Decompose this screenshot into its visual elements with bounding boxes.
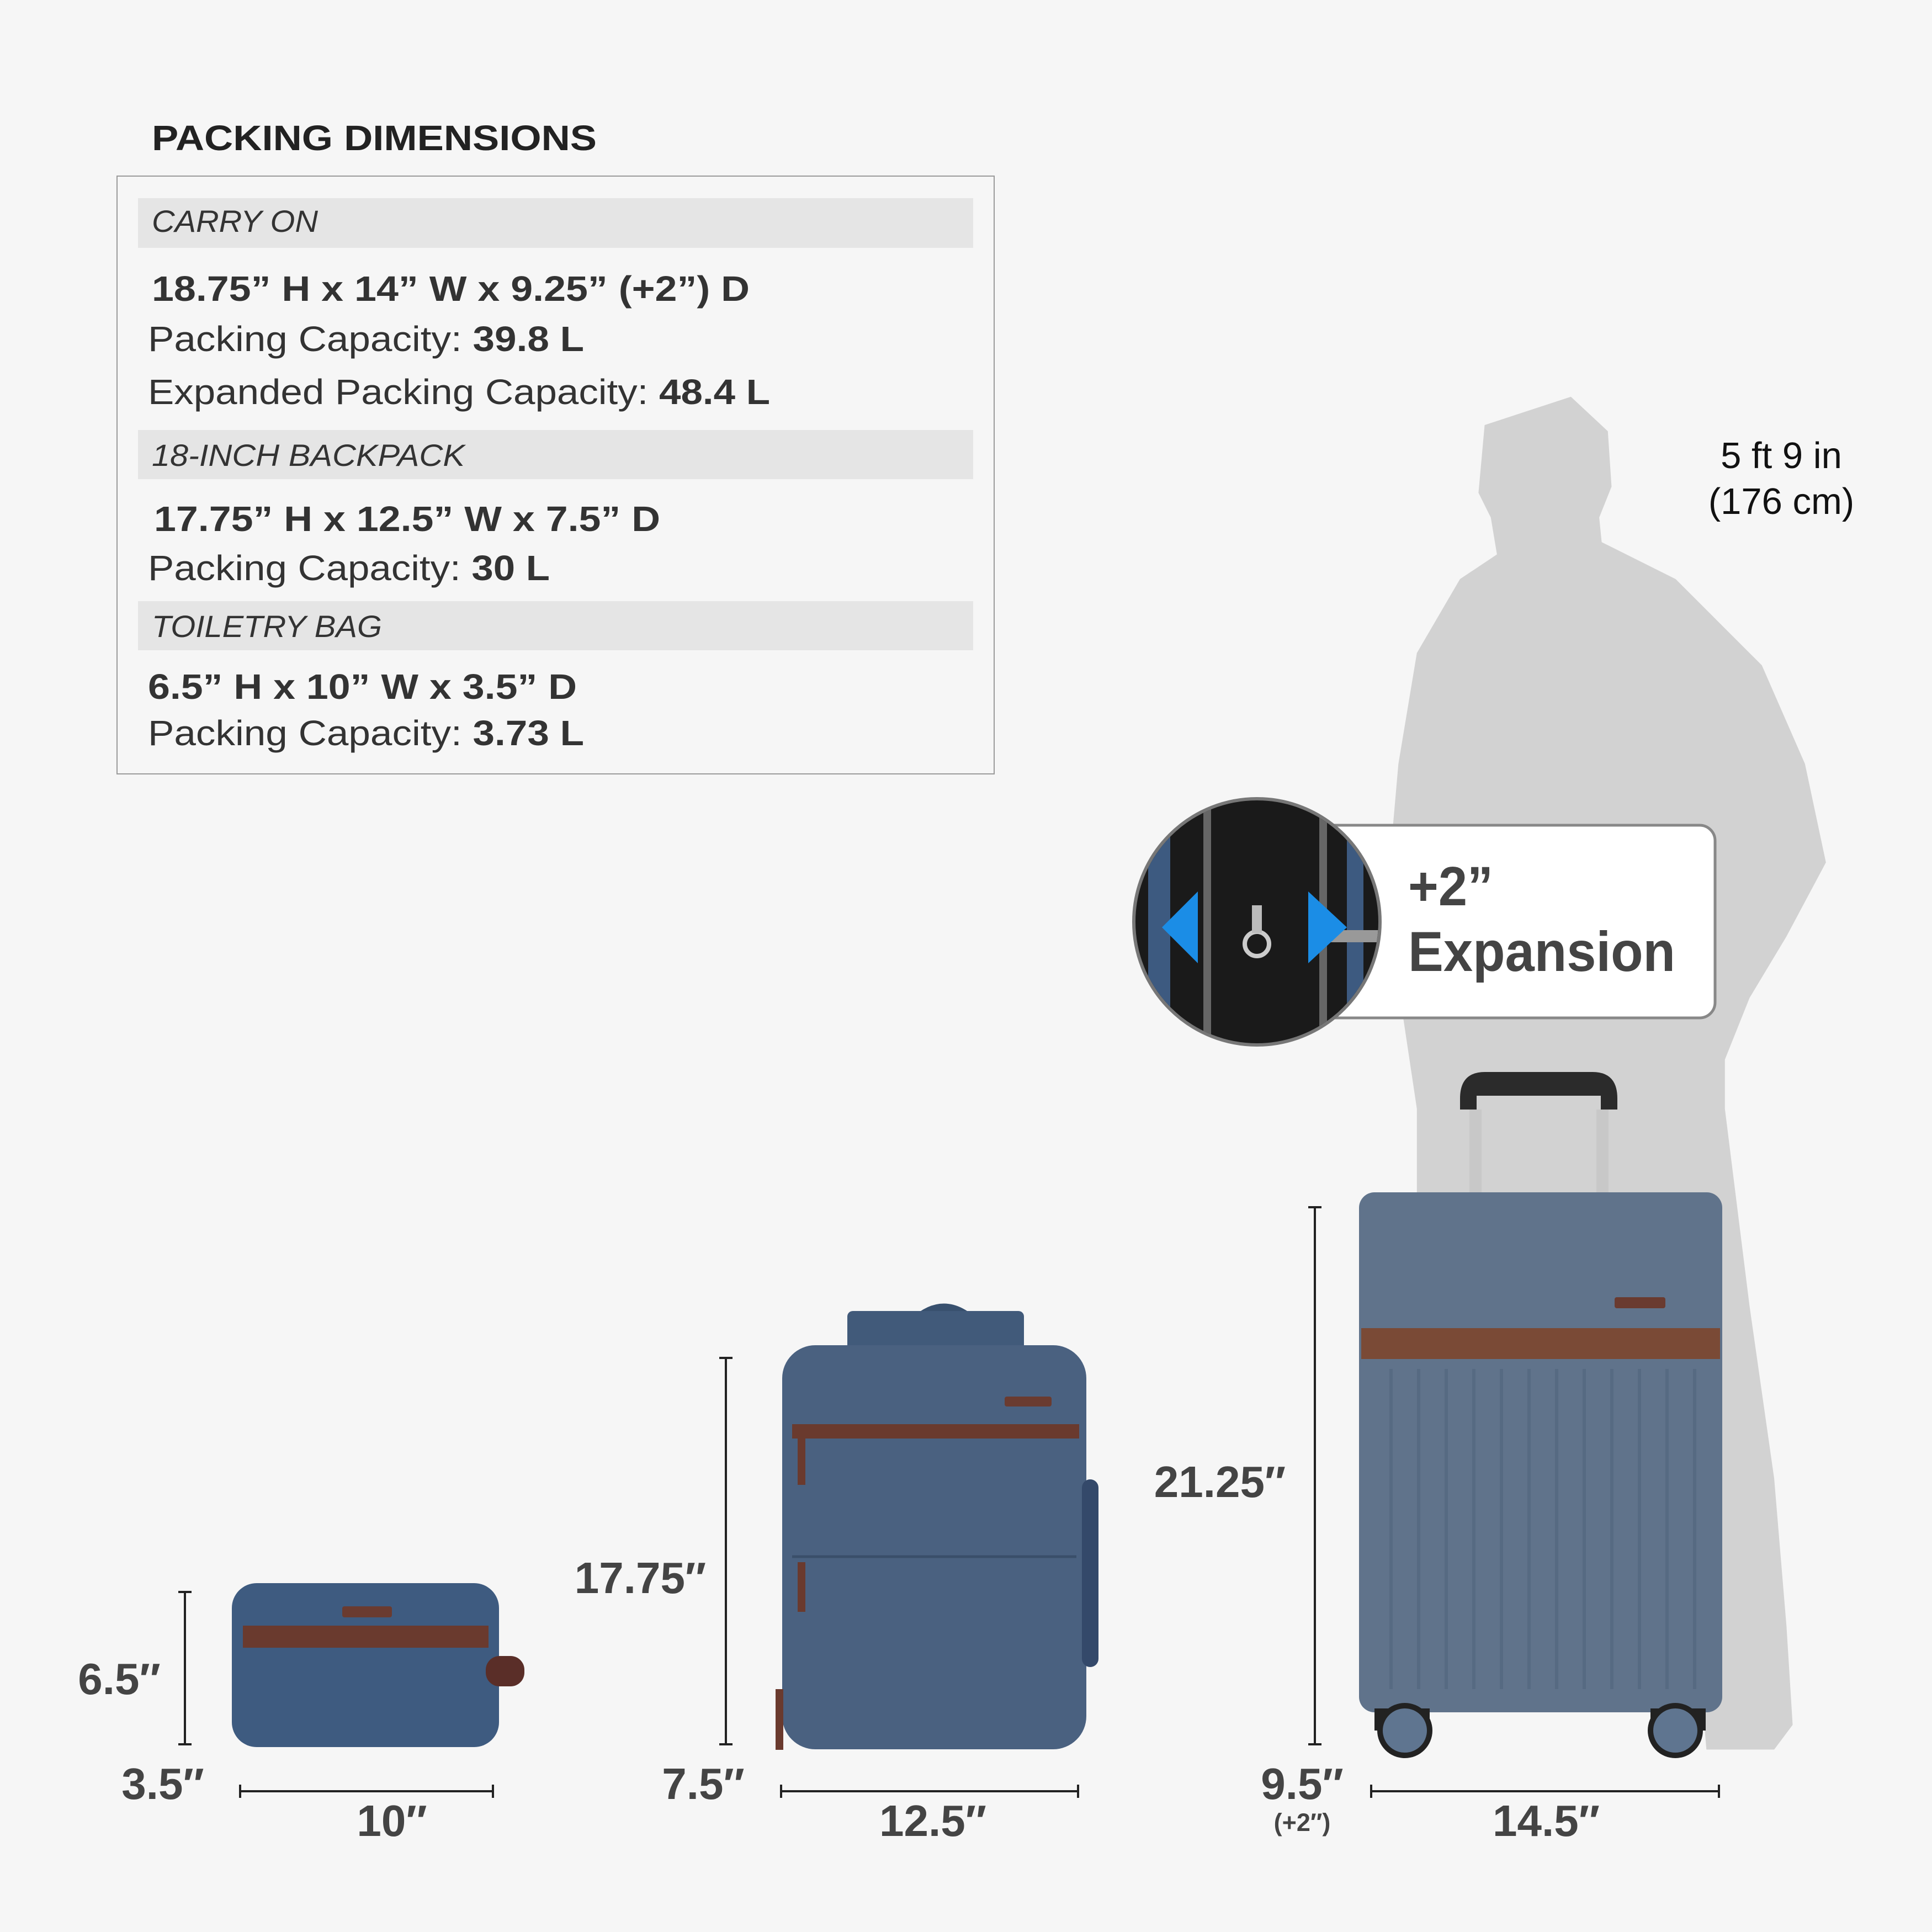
panel: packing dimensions table xyxy=(117,176,994,774)
header: toiletry bag: TOILETRY BAG xyxy=(152,609,382,644)
dimension labels: 9.5″ xyxy=(1261,1759,1344,1808)
text: carry on specs xyxy=(148,269,770,412)
header: carry on xyxy=(138,198,973,248)
text: carry on specs: Packing Capacity: 39.8 L xyxy=(148,319,584,359)
dimension labels: 17.75″ xyxy=(575,1553,706,1602)
text: backpack specs: Packing Capacity: 30 L xyxy=(148,548,550,588)
text: backpack specs: 17.75” H x 12.5” W x 7.5” D xyxy=(154,499,660,539)
silhouette: person xyxy=(1390,397,1826,1749)
header: backpack xyxy=(138,430,973,479)
height label xyxy=(1708,435,1854,522)
dimension labels: 10″ xyxy=(357,1796,427,1845)
callout: expansion xyxy=(1134,795,1715,1049)
height label: 5 ft 9 in xyxy=(1721,435,1842,476)
text: carry on specs: Expanded Packing Capacity: 48.4 L xyxy=(148,372,770,412)
toiletry bag xyxy=(232,1583,524,1747)
height label: (176 cm) xyxy=(1708,481,1854,522)
dimension labels xyxy=(78,1457,1600,1845)
text: toiletry specs xyxy=(148,667,584,753)
text: toiletry specs: Packing Capacity: 3.73 L xyxy=(148,713,584,753)
text: backpack specs xyxy=(148,499,660,588)
text: toiletry specs: 6.5” H x 10” W x 3.5” D xyxy=(148,667,577,707)
dimension labels: 14.5″ xyxy=(1493,1796,1600,1845)
suitcase xyxy=(1359,1072,1722,1758)
header: carry on: CARRY ON xyxy=(152,204,319,238)
text: carry on specs: 18.75” H x 14” W x 9.25” (+2”) D xyxy=(152,269,750,309)
header: backpack: 18-INCH BACKPACK xyxy=(152,438,466,473)
dimension labels: (+2″) xyxy=(1274,1808,1330,1837)
dimension labels: 12.5″ xyxy=(879,1796,986,1845)
dimension labels: 6.5″ xyxy=(78,1654,161,1703)
icon: zipper close-up xyxy=(1134,795,1380,1049)
dimension labels: 7.5″ xyxy=(662,1759,745,1808)
header: toiletry bag xyxy=(138,601,973,650)
dimension labels: 3.5″ xyxy=(121,1759,204,1808)
arrow: expansion xyxy=(1162,891,1198,963)
title: PACKING DIMENSIONS xyxy=(152,118,597,158)
dimension lines xyxy=(178,1207,1719,1798)
callout: expansion: +2” xyxy=(1408,856,1493,917)
callout: expansion: Expansion xyxy=(1408,920,1675,983)
backpack xyxy=(776,1309,1098,1750)
dimension labels: 21.25″ xyxy=(1154,1457,1286,1506)
